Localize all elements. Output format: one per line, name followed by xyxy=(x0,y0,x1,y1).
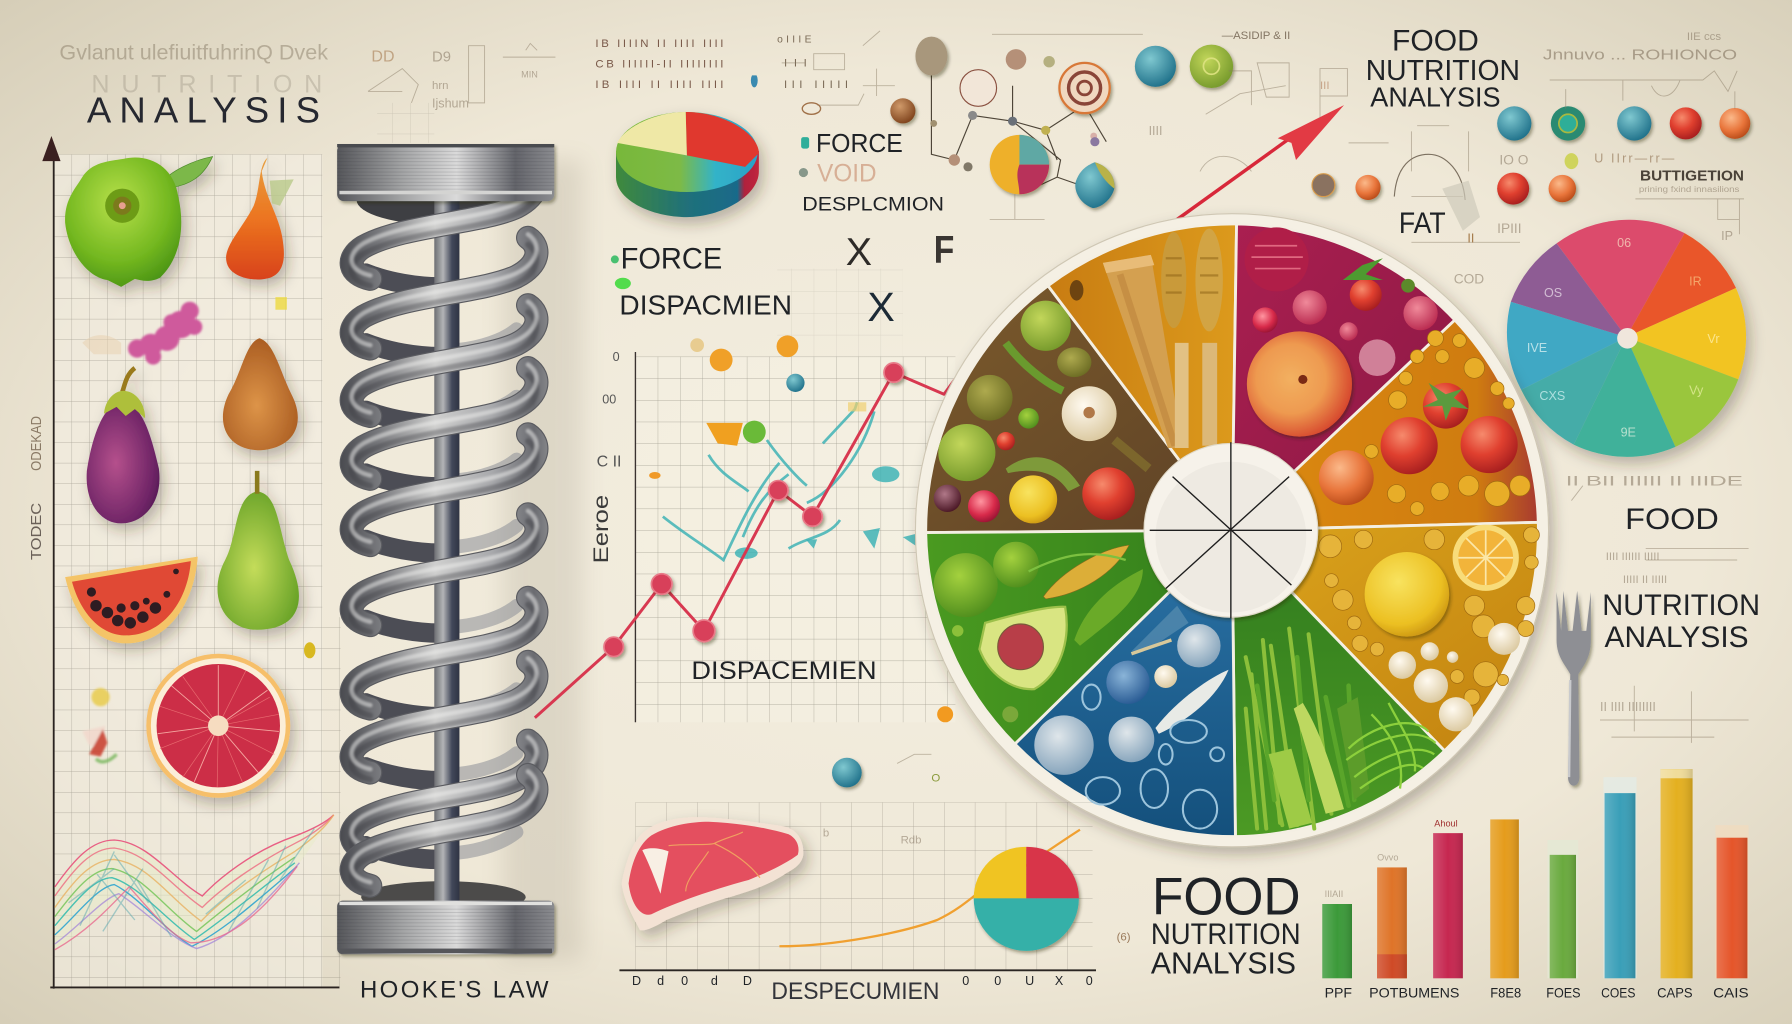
heading: food nutrition analysis (top right): FOOD xyxy=(1392,24,1479,57)
sketch notes: top center: III xyxy=(784,57,807,69)
chart: right color wheel xyxy=(1507,220,1746,457)
plate rim xyxy=(915,214,1549,847)
spring back strands xyxy=(366,273,517,859)
heading: food nutrition analysis (bottom): FOOD xyxy=(1152,867,1301,926)
x axis xyxy=(50,986,339,988)
chart: right color wheel: 9E xyxy=(1621,426,1636,440)
arrow: red upward xyxy=(1177,105,1344,219)
heading: food nutrition analysis (top right): NUTRITION xyxy=(1366,55,1520,87)
spring dark base xyxy=(361,881,526,913)
bottom tick labels: D xyxy=(743,974,752,988)
sketch notes: top left: DD xyxy=(371,49,395,66)
chart teal blobs xyxy=(735,466,926,559)
heading: food nutrition analysis (top right): ANALYSIS xyxy=(1370,81,1501,112)
spring shadow xyxy=(503,160,583,960)
bottom tick labels: 0 xyxy=(681,974,688,988)
bar labels: PPF xyxy=(1325,986,1352,1002)
sketch notes: top left: Ijshum xyxy=(432,96,469,110)
bar chart: nutrients xyxy=(1322,769,1749,1002)
label displacement: DISPACMIEN xyxy=(619,289,792,320)
sketch notes: top center: IB IIIIN II IIII IIII xyxy=(595,38,723,50)
heading: food nutrition analysis (right): ANALYSIS xyxy=(1605,621,1749,654)
sketch notes: right middle: IIIII II IIIII xyxy=(1623,574,1667,586)
sketch: near teal ball: b xyxy=(823,828,829,840)
sketch: near teal ball xyxy=(823,754,940,846)
bottom tick labels: d xyxy=(711,974,718,988)
legend label displacement: DESPLCMION xyxy=(802,193,944,215)
chart: right color wheel: Vy xyxy=(1689,383,1704,397)
bottom tick labels: X xyxy=(1055,974,1064,988)
bar labels: F8E8 xyxy=(1490,986,1521,1002)
symbols: X and F: X xyxy=(867,284,895,330)
fruit: brown pear xyxy=(223,338,298,450)
label: Hooke's law: HOOKE'S LAW xyxy=(360,977,549,1004)
sketch notes: right middle xyxy=(1566,474,1749,743)
sketch notes: right middle: II IIII IIIIIIII xyxy=(1600,700,1656,714)
brown ball xyxy=(890,98,915,123)
bottom axis label: DESPECUMIEN xyxy=(771,978,939,1005)
chart: right color wheel: IVE xyxy=(1527,341,1547,355)
sketch notes: top center: IB IIII II IIII IIII xyxy=(595,79,723,91)
bar: blue glass xyxy=(1603,777,1637,978)
sketch notes: top left: MIN xyxy=(521,70,538,80)
sketch notes: top left: D9 xyxy=(432,50,451,66)
center dial lines xyxy=(1150,442,1312,618)
fat diagram: II xyxy=(1467,231,1474,245)
colored nutrient balls row 2 xyxy=(1312,173,1576,205)
spring: Hooke's law coil xyxy=(337,144,554,954)
sketch notes: right middle: IIII IIIIII IIIII xyxy=(1606,551,1660,563)
chart tick labels: C II xyxy=(597,453,621,470)
note: nutrition table: IP xyxy=(1721,229,1733,243)
legend: force, void, displacement xyxy=(799,128,944,215)
bar labels: CAPS xyxy=(1657,986,1693,1002)
sketch: near teal ball: Rdb xyxy=(901,834,922,846)
fat diagram: IPIII xyxy=(1497,221,1522,236)
nodes xyxy=(930,49,1099,171)
chart: right color wheel: 06 xyxy=(1617,236,1631,250)
food: raw meat xyxy=(622,817,803,930)
segment: grains (gold) xyxy=(1048,224,1237,530)
fruit: citrus wedge xyxy=(65,557,198,643)
chart: right color wheel: OS xyxy=(1544,286,1562,300)
sketch notes: top right center: III xyxy=(1320,80,1330,92)
fruit: green apple xyxy=(65,157,213,287)
bottom tick labels: 0 xyxy=(962,974,969,988)
sketch notes: top right: Jnnuvo ... ROHIONCO xyxy=(1543,47,1737,63)
sketch notes: top left xyxy=(59,39,555,110)
spring bottom plate xyxy=(337,901,554,954)
sketch notes: top right center xyxy=(1200,30,1347,171)
label: fat: FAT xyxy=(1399,207,1446,240)
bottom tick labels: U xyxy=(1025,974,1034,988)
legend label faded: VOID xyxy=(817,160,877,188)
molecule diagram: IIII xyxy=(1149,124,1163,138)
bar labels: FOES xyxy=(1546,986,1581,1002)
chart dots xyxy=(649,335,953,722)
note: nutrition table: BUTTIGETION xyxy=(1640,169,1744,185)
panel: left graph grid xyxy=(42,103,434,989)
fruit: eggplant xyxy=(87,368,159,523)
sketch notes: top left: Gvlanut ulefiuitfuhrinQ Dvek xyxy=(59,39,328,64)
sketch: near teal ball: O xyxy=(931,773,940,785)
bar: red glass xyxy=(1715,825,1749,978)
chart: bottom displacement grid xyxy=(619,802,1096,1005)
teal ball xyxy=(1075,162,1114,208)
loop sketch xyxy=(960,70,997,106)
sketch notes: top center: III IIIII xyxy=(784,79,848,91)
legend marker grey xyxy=(799,168,808,177)
molecule pie xyxy=(990,135,1049,194)
small pie: bottom xyxy=(974,847,1079,951)
symbols: X and F: X xyxy=(846,231,872,274)
bottom tick labels: 0 xyxy=(994,974,1001,988)
bar: green glass xyxy=(1547,840,1578,978)
left axis labels xyxy=(29,416,45,560)
bottom tick labels xyxy=(632,974,1093,988)
orange curve xyxy=(779,830,1080,946)
bottom axis xyxy=(619,969,1096,971)
sketch notes: top center: oIIIE xyxy=(777,34,812,45)
sketch marks xyxy=(990,34,1143,219)
plate: food nutrition wheel xyxy=(915,214,1549,847)
legend label force: FORCE xyxy=(816,128,903,158)
small sketch row: IO O xyxy=(1499,153,1528,168)
left axis labels: TODEC xyxy=(29,503,45,560)
bar labels: COES xyxy=(1601,986,1635,1002)
chart orange wedge and green dot xyxy=(706,421,766,446)
fruit: pink flowers xyxy=(128,302,202,365)
fat diagram xyxy=(1349,126,1522,286)
spring front coils xyxy=(352,165,536,893)
bottom tick labels: D xyxy=(632,974,641,988)
fruit: small flower sketch xyxy=(82,688,117,762)
sketch notes: top right: IIE ccs xyxy=(1687,31,1721,43)
bar labels xyxy=(1325,986,1749,1002)
sketch notes: top right xyxy=(1543,31,1737,109)
label force: FORCE xyxy=(621,243,722,276)
chart: red force line xyxy=(535,357,971,718)
chart teal scribbles xyxy=(663,402,874,560)
bar: orange: Ovvo xyxy=(1377,853,1398,863)
sketch notes: top right center: —ASIDIP & II xyxy=(1222,30,1290,42)
fat diagram: COD xyxy=(1454,271,1484,286)
chart tick labels xyxy=(597,350,621,470)
chart tick labels: 00 xyxy=(602,392,616,406)
left axis labels: ODEKAD xyxy=(29,416,45,471)
symbols: X and F xyxy=(846,229,954,330)
bar labels: CAIS xyxy=(1713,986,1749,1002)
bar: orange xyxy=(1377,853,1407,978)
bar: crimson xyxy=(1433,818,1463,978)
title: analysis: ANALYSIS xyxy=(87,89,320,130)
bar: amber xyxy=(1490,819,1519,978)
marker bright green xyxy=(615,278,631,289)
fork xyxy=(1557,591,1591,786)
heading: food nutrition analysis (bottom) xyxy=(1151,867,1301,981)
small yellow marker dots xyxy=(275,297,315,658)
legend marker teal xyxy=(801,137,809,149)
sketch notes: top center xyxy=(595,31,895,114)
title: faded nutrition: NUTRITION xyxy=(91,71,322,99)
colored nutrient balls row 1 xyxy=(1497,106,1750,141)
segment: green avocado xyxy=(926,530,1232,744)
small sketch row: U IIrr—rr— xyxy=(1594,151,1675,165)
fruit: leaf fragment xyxy=(270,179,294,206)
bottom tick labels: 0 xyxy=(1086,974,1093,988)
small note: left of bottom heading: (6) xyxy=(1117,932,1131,944)
sketch notes: top center: CB IIIIII-II IIIIIIII xyxy=(595,58,723,70)
heading: food nutrition analysis (bottom): ANALYSIS xyxy=(1151,946,1296,981)
spring central rod xyxy=(434,197,459,903)
segment: fruits and nuts (brown) xyxy=(926,286,1232,533)
chart: right color wheel: Vr xyxy=(1707,332,1720,346)
sketch notes: top left: hrn xyxy=(432,80,448,92)
spring top plate xyxy=(337,144,554,201)
molecule diagram xyxy=(890,34,1163,219)
segment: green stalks xyxy=(1232,530,1445,837)
fruit: grapefruit slice xyxy=(146,654,290,798)
chart: rainbow wave lines xyxy=(55,815,334,950)
center bowl xyxy=(1144,443,1318,617)
teal ball xyxy=(832,758,862,787)
bottom tick labels: d xyxy=(657,974,664,988)
y axis arrow xyxy=(42,136,61,989)
chart y axis xyxy=(634,352,636,722)
chart: right color wheel: IR xyxy=(1689,275,1702,289)
chart: right color wheel: CXS xyxy=(1539,389,1565,403)
bar labels: POTBUMENS xyxy=(1369,986,1459,1002)
brown oval xyxy=(915,37,947,75)
bar: green: IIIAII xyxy=(1325,889,1343,899)
note: nutrition table xyxy=(1635,169,1744,243)
spiral ball xyxy=(1059,63,1110,113)
symbols: X and F: F xyxy=(934,229,954,272)
fruit: green pear xyxy=(217,471,299,630)
heading: food nutrition analysis (top right) xyxy=(1366,24,1520,112)
bar: green xyxy=(1322,889,1352,978)
chart y label: Eeroe xyxy=(588,495,613,563)
segment: yellow citrus xyxy=(1232,522,1539,751)
fruit: small sketch near flowers xyxy=(82,335,121,354)
heading: food nutrition analysis (right): NUTRITION xyxy=(1602,589,1760,622)
chart label: displacement: DISPACEMIEN xyxy=(691,657,877,685)
sketch notes: right middle: II BII IIIIII II IIIDE xyxy=(1566,474,1743,489)
small sketch row xyxy=(1499,151,1675,169)
fruit: orange teardrop xyxy=(226,158,284,279)
heading: food nutrition analysis (bottom): NUTRITION xyxy=(1151,918,1301,951)
chart tick labels: 0 xyxy=(613,350,620,364)
heading: food nutrition analysis (right): FOOD xyxy=(1625,503,1719,536)
segment: orange vegetables xyxy=(1232,320,1538,530)
note: nutrition table: prining fxind innasilions xyxy=(1639,185,1739,194)
chart: 3D pie xyxy=(616,112,759,217)
colored balls: top xyxy=(1135,45,1233,88)
spring dark dome top xyxy=(357,175,530,225)
segment: blue seafood xyxy=(1015,530,1235,837)
bar: crimson: Ahoul xyxy=(1434,818,1458,828)
legend: force and displacement xyxy=(611,243,792,320)
chart: force displacement grid xyxy=(588,269,955,722)
segment: berries and apple (crimson) xyxy=(1232,224,1455,530)
bar: yellow glass xyxy=(1661,769,1693,978)
marker green xyxy=(611,255,619,263)
bonds xyxy=(931,75,1106,185)
heading: food nutrition analysis (right) xyxy=(1602,503,1760,654)
